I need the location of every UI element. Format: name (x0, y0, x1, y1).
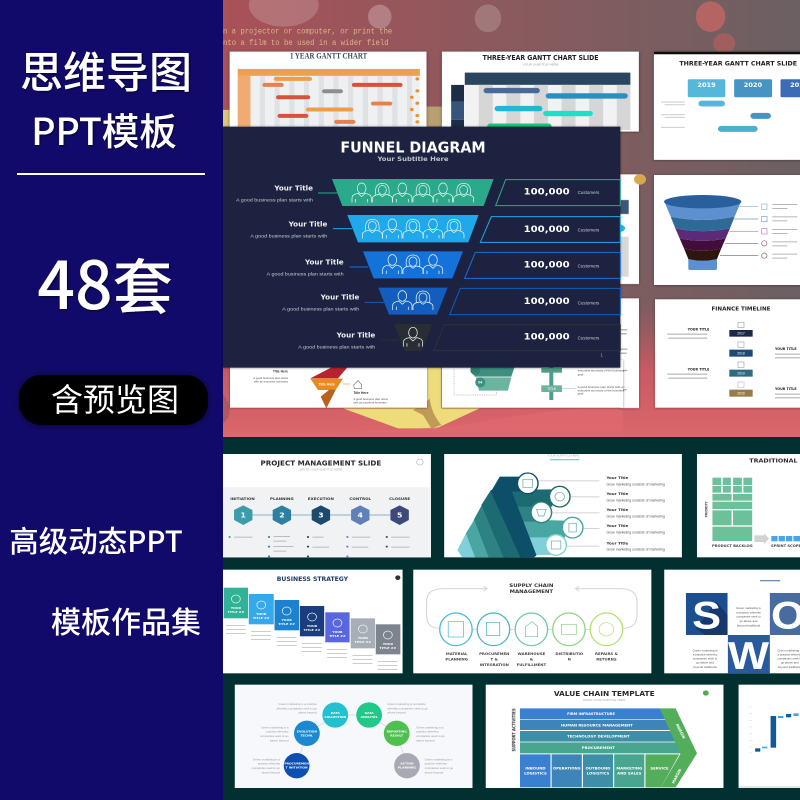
slide: business strategy (223, 570, 403, 673)
slide: circular process: Green marketing is a (261, 725, 289, 729)
slide: three-year gantt chart variant: 2020 (744, 83, 763, 89)
slide: circular process: Green marketing is a (425, 757, 452, 761)
slide: value chain template: INBOUND (525, 766, 546, 770)
slide: business strategy: YOUR (306, 624, 318, 628)
slide: circular process: Green marketing is a practice (387, 702, 426, 706)
slide: circular process: companies seek to go (416, 734, 445, 738)
slide: project management: EXECUTION (308, 496, 334, 501)
slide: project management: WRITE YOUR SUBTITLE HERE (300, 468, 342, 472)
slide: business strategy: TITLE ## (253, 616, 270, 620)
slide: supply chain management: DISTRIBUTIO (555, 652, 583, 656)
slide: value chain template: AND SALES (617, 772, 642, 776)
slide: project management (223, 454, 431, 557)
slide: circular process: practice whereby (266, 730, 289, 734)
slide: SWOT: W (728, 634, 770, 678)
funnel tier 2 (250, 215, 620, 242)
slide: circular process: DATA (331, 711, 340, 715)
slide: finance timeline: 2017 (737, 332, 745, 336)
slide: business strategy: YOUR (382, 642, 394, 646)
funnel tier 1 (236, 179, 620, 206)
slide: business strategy: YOUR (255, 612, 267, 616)
text: premium animated PPT: 高级动态PPT (9, 519, 183, 561)
slide: SWOT: S (692, 593, 721, 637)
funnel tier 2: Your Title (288, 220, 328, 228)
funnel tier 3: 100,000 (524, 261, 570, 271)
slide: stepped pyramid: Grow marketing consists of marketing (606, 530, 665, 534)
slide: supply chain management: T & (491, 658, 499, 662)
slide: value chain template: LOGISTICS (524, 772, 547, 776)
slide: business strategy: YOUR (357, 636, 369, 640)
panel: left title column (0, 0, 223, 800)
slide: circular process: REPORTING (387, 730, 407, 734)
slide: folded arrow list: Title Here (353, 391, 369, 395)
slide: finance timeline: FINANCE TIMELINE (711, 307, 771, 313)
slide: circular process (235, 685, 473, 788)
slide: value chain template: HUMAN RESOURCE MANAGEMENT (561, 723, 633, 727)
funnel tier 4: Customers (578, 300, 600, 305)
slide: business strategy: TITLE ## (278, 622, 295, 626)
slide: value chain template (486, 685, 723, 788)
funnel tier 3 (267, 251, 620, 278)
funnel tier 1: 100,000 (524, 187, 570, 197)
slide: stepped pyramid: Grow marketing consists of marketing (606, 498, 665, 502)
slide: circular process: companies seek to go (260, 734, 289, 738)
slide: three-year gantt chart: YOUR SUBTITLE HERE (522, 62, 559, 66)
slide: teal funnel and milestones: TITLE (547, 387, 557, 391)
slide: value chain template: SERVICE (650, 766, 669, 770)
slide: stepped pyramid (444, 454, 682, 557)
funnel tier 2: 100,000 (524, 225, 570, 235)
slide: 1 year gantt chart: 1 YEAR GANTT CHART (290, 51, 368, 61)
slide: stepped pyramid: Grow marketing consists of marketing (606, 482, 665, 486)
slide: SWOT: go above and (696, 661, 714, 665)
slide: circular process: practice whereby (258, 762, 281, 766)
slide: traditional scrum (697, 454, 800, 557)
slide: circular process: DATA (365, 711, 374, 715)
slide: supply chain management: INTEGRATION (480, 663, 509, 667)
slide: project management: 4 (358, 511, 363, 520)
slide: folded arrow list: A good business plan starts (353, 397, 388, 401)
funnel tier 4: A good business plan starts with (282, 306, 360, 311)
funnel graphic (664, 195, 741, 270)
slide: project management: 1 (241, 511, 246, 520)
funnel tier 1: Customers (578, 190, 600, 195)
slide: SWOT: beyond traditional (694, 665, 717, 669)
slide: SWOT: beyond traditional (737, 623, 760, 627)
slide: business strategy: YOUR (230, 606, 242, 610)
slide: circular process: ANALYSIS (361, 715, 378, 719)
slide: SWOT: go above and (781, 661, 799, 665)
slide: project management: 5 (397, 511, 402, 520)
slide: traditional scrum: PRODUCT BACKLOG (712, 544, 753, 548)
slide: 1 year gantt chart (230, 51, 427, 132)
slide: three-year gantt chart (442, 52, 639, 132)
panel: top red collage background: n a projector or computer, or print the (223, 26, 392, 36)
slide: three-year gantt chart variant (654, 52, 800, 160)
slide: business strategy: TITLE ## (354, 640, 372, 644)
slide: business strategy: TITLE ## (228, 610, 245, 614)
row 2 of slides (223, 454, 800, 557)
slide: business strategy: TITLE ## (304, 628, 321, 632)
slide: supply chain management: WAREHOUSE (518, 652, 546, 656)
slide: folded arrow list: Title Here (273, 370, 288, 374)
pill: includes preview (19, 375, 208, 425)
slides: lower cards peeking under funnel diagram (230, 360, 625, 408)
heading: mind map: 思维导图 (20, 39, 192, 101)
slide: supply chain management: MANAGEMENT (510, 589, 554, 595)
slide: value chain template: MARGIN (671, 768, 683, 784)
slide: funnel chart and finance timeline column (620, 174, 800, 408)
lower gold decoration (223, 360, 623, 437)
slide: three-year gantt chart: THREE-YEAR GANTT CHART SLIDE (483, 53, 599, 62)
slide: business strategy: TITLE ## (379, 646, 397, 650)
slide: business strategy: BUSINESS STRATEGY (277, 575, 348, 583)
slide: value chain template: MARGIN (675, 723, 686, 739)
slide: finance timeline: YOUR TITLE (687, 367, 710, 371)
slide: supply chain management (413, 570, 651, 673)
slide: circular process: PLANNING (398, 766, 417, 770)
slide: teal funnel and milestones: executive summary of the business (578, 369, 625, 373)
slide: circular process: practice whereby (416, 730, 439, 734)
slide: folded arrow list: A good business plan starts (253, 376, 289, 380)
slide: value chain template: FIRM INFRASTRUCTURE (567, 712, 615, 716)
slide: value chain template: OUTBOUND (586, 766, 610, 770)
panel: top red collage background: nto a film to be used in a wider field (223, 37, 389, 48)
funnel tier 4: 100,000 (524, 297, 570, 307)
slide: circular process: Green marketing is a practice (279, 702, 317, 706)
slide: project management: 3 (318, 511, 324, 520)
slide: circular process: practice whereby (425, 762, 447, 766)
slide: business strategy: YOUR (331, 630, 343, 634)
slide: value chain template: TECHNOLOGY DEVELOPMENT (567, 735, 630, 739)
slide: three-year gantt chart variant: 2019 (697, 83, 716, 89)
slide: teal funnel and milestones: 04 (478, 381, 483, 385)
funnel tier 5: 100,000 (524, 333, 570, 343)
slide: folded arrow list: with an excellent summary (353, 401, 387, 405)
slide: circular process: Green marketing is a (416, 725, 444, 729)
funnel tier 3: Customers (578, 263, 600, 268)
funnel tier 2: A good business plan starts with (250, 233, 328, 238)
slide: finance timeline: YOUR TITLE (774, 347, 797, 351)
funnel tier 5 (298, 324, 620, 351)
slide: folded arrow list (230, 360, 427, 408)
slide: value chain template: OPERATIONS (553, 766, 581, 770)
funnel tier 5: A good business plan starts with (298, 344, 376, 349)
slide: stepped pyramid: Your Title (605, 523, 629, 528)
slide edge cards behind funnel diagram (620, 174, 646, 408)
slide: stepped pyramid: Grow marketing consists of marketing (606, 514, 665, 518)
slide: supply chain management: N (568, 658, 571, 662)
slide: finance timeline: 2018 (737, 351, 745, 355)
slide: project management: PLANNING (270, 496, 294, 501)
slide: project management: 2 (279, 511, 285, 520)
slide: supply chain management: & (530, 658, 534, 662)
slide: circular process: TECHN. (300, 734, 313, 738)
slide: business strategy: YOUR (280, 618, 292, 622)
slide: teal funnel and milestones: goal (578, 392, 584, 396)
funnel subtitle: Your Subtitle Here (376, 156, 448, 163)
funnel tier 2: Customers (578, 228, 600, 233)
slide: finance timeline: YOUR TITLE (774, 387, 797, 391)
funnel tier 5: Your Title (336, 332, 376, 340)
slide: teal funnel and milestones: executive summary of the business (578, 388, 625, 392)
slide: value chain template: SUPPORT ACTIVITIES (511, 708, 517, 752)
big count: 48套 (37, 233, 173, 329)
slide: circular process: whereby companies seek to go (276, 706, 317, 710)
slide: stepped pyramid: Grow marketing consists of marketing (606, 548, 665, 552)
slide: stepped pyramid: Your Title (605, 541, 629, 545)
row 3 of slides (223, 570, 800, 678)
slide: circular process: RESULT (390, 734, 404, 738)
slide: circular process: whereby companies seek to go (387, 706, 428, 710)
slide: circular process: COLLECTION (324, 715, 347, 719)
slide: supply chain management: REPAIRS & (595, 652, 619, 656)
slide: stepped pyramid: Your Title (605, 491, 629, 496)
slide: supply chain management: MATERIAL (446, 652, 468, 656)
slide: project management: CLOSURE (389, 496, 410, 501)
slide: teal funnel and milestones: goal (578, 373, 584, 377)
funnel tier 3: Your Title (304, 259, 344, 267)
slide: circular process: above beyond (425, 770, 444, 774)
slide: supply chain management: PROCUREMEN (479, 652, 509, 656)
slide: circular process: above beyond (262, 770, 281, 774)
slide number: 1 (600, 353, 603, 358)
row 4 of slides (235, 685, 800, 788)
slide: value chain template: LOGISTICS (587, 772, 610, 776)
panel: top slide cards (230, 51, 800, 160)
slide: traditional scrum: PRIORITY (704, 501, 708, 517)
funnel tier 4 (282, 288, 620, 315)
panel: top red collage background (223, 0, 800, 437)
pill: includes preview: 含预览图 (51, 375, 179, 421)
slide: supply chain management: FULFILLMENT (517, 663, 547, 667)
funnel tier 1: A good business plan starts with (236, 198, 313, 203)
slide: SWOT (664, 570, 800, 678)
slide: SWOT: Green marketing is (693, 649, 718, 653)
slide: circular process: above beyond (270, 738, 289, 742)
slide: folded arrow list: Title Here (318, 382, 335, 386)
slide: stepped pyramid: Your Title (605, 475, 629, 480)
funnel tier 4: Your Title (320, 294, 360, 302)
funnel tier 5: Customers (578, 336, 600, 341)
slide: circular process: PROCUREMEN (284, 762, 309, 766)
slide: value chain template: VALUE CHAIN TEMPLATE (554, 689, 655, 698)
slide: stepped pyramid: Your Title (605, 507, 629, 512)
slide: circular process: above beyond (387, 711, 406, 715)
slide: supply chain management: SUPPLY CHAIN (509, 583, 554, 589)
slide: SWOT: companies seek to (736, 615, 761, 619)
slide: circular process: above beyond (416, 738, 435, 742)
slide: value chain template: MARKETING (616, 766, 642, 770)
divider (17, 173, 205, 175)
slide: supply chain management: RETURNS (596, 658, 617, 662)
slide: finance timeline: YOUR TITLE (687, 327, 710, 331)
funnel tier 1: Your Title (273, 185, 313, 193)
slide: teal funnel and milestones (442, 360, 625, 408)
slide: value chain template: WRITE YOUR SUBTITLE HERE (583, 698, 626, 702)
slide: folded arrow list: with an executive summary (254, 380, 289, 384)
slide: funnel chart (654, 175, 800, 285)
text: template collection: 模板作品集 (51, 598, 201, 642)
slide: circular process: companies seek to go (425, 766, 454, 770)
slide: finance timeline: 2020 (737, 391, 745, 395)
slide: finance timeline (655, 299, 800, 408)
slide: waterfall bar chart (739, 685, 800, 788)
slide: teal funnel and milestones: A good business plan starts with an (578, 385, 625, 389)
slide: SWOT: a practice whereby (736, 610, 761, 614)
slide: value chain template: PROCUREMENT (582, 746, 615, 750)
slide: supply chain management: PLANNING (445, 658, 468, 662)
slide: SWOT: Green marketing is (736, 606, 762, 610)
slide: circular process: T INITIATION (286, 766, 308, 770)
slide: SWOT: a practice whereby (693, 652, 718, 656)
funnel title: FUNNEL DIAGRAM (340, 139, 486, 156)
heading: PPT template: PPT模板 (31, 101, 177, 156)
slide: project management: INITIATION (230, 496, 255, 501)
slide: project management: CONTROL (349, 496, 372, 501)
funnel tier 3: A good business plan starts with (267, 271, 344, 276)
slide: circular process: ACTION (400, 762, 414, 766)
slide: circular process: Green marketing is a (253, 757, 280, 761)
slide: circular process: above beyond (298, 711, 317, 715)
slide: circular process: companies seek to go (252, 766, 280, 770)
slide: circular process: EVOLUTION (297, 730, 317, 734)
slide: SWOT: companies seek to (693, 656, 718, 660)
slide: SWOT: go above and (740, 619, 758, 623)
slide: business strategy: TITLE ## (329, 634, 346, 638)
slide: finance timeline: 2019 (737, 371, 745, 375)
funnel leader lines and icons (720, 204, 767, 258)
slide: funnel diagram hero (223, 127, 620, 368)
slide: stepped pyramid: YOUR SUBTITLE HERE (547, 454, 580, 458)
slide: project management: PROJECT MANAGEMENT SLIDE (261, 459, 381, 468)
